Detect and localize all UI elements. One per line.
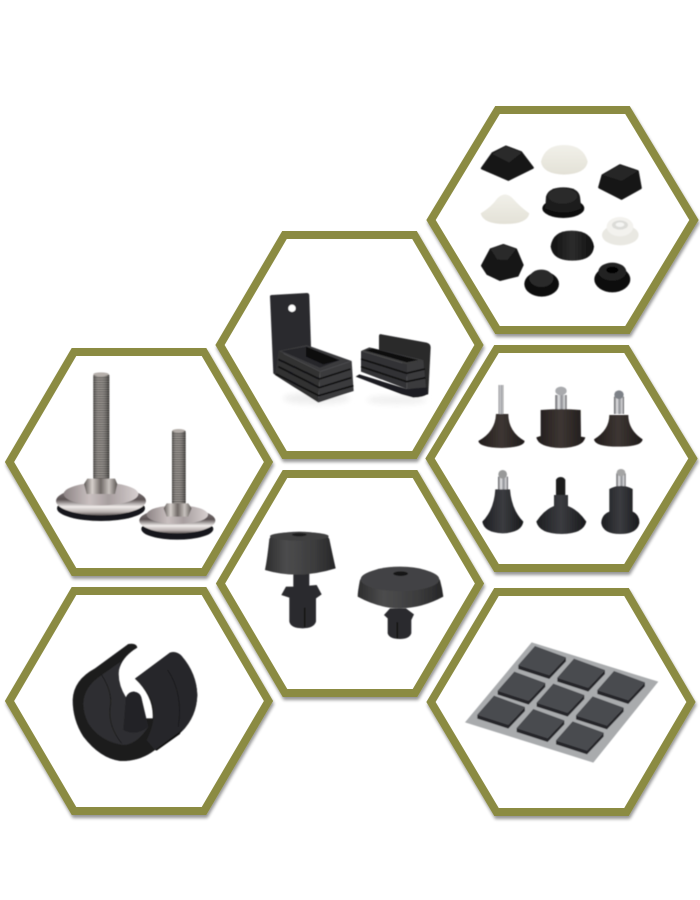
hexagon frame	[431, 592, 691, 812]
hexagon frame	[431, 110, 694, 330]
panel: plunger bumpers	[220, 474, 480, 693]
product: two steel levelling feet	[56, 372, 215, 540]
hexagon frame	[10, 352, 268, 572]
hexagon frame	[10, 591, 268, 811]
hexagon frame	[220, 474, 480, 693]
panel: bell glides	[430, 349, 693, 568]
hexagon frame	[220, 235, 479, 455]
panel: rubber bumpers	[431, 110, 694, 330]
product: black open clip	[73, 644, 197, 761]
panel: chair glide clip	[10, 591, 268, 811]
product: assorted rubber bumpers	[481, 145, 641, 297]
product: two push-in bumpers	[265, 532, 443, 639]
product: black ribbed tube inserts	[270, 293, 431, 405]
product: six chair bell glides	[478, 385, 643, 534]
panel: levelling feet	[10, 352, 268, 572]
hexagon frame	[430, 349, 693, 568]
panel: adhesive pad sheet	[431, 592, 691, 812]
panel: tube inserts	[220, 235, 479, 455]
product: sheet of nine square pads	[465, 642, 658, 763]
